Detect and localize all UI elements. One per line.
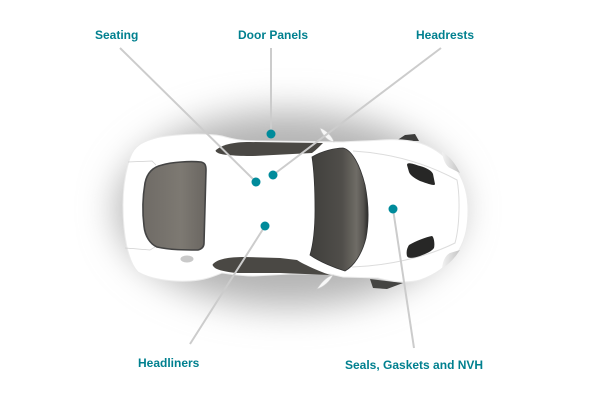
top mirror — [320, 128, 334, 142]
label: Headrests: Headrests — [416, 28, 474, 42]
windshield — [310, 148, 368, 271]
fuel cap — [180, 256, 194, 262]
marker: Seating — [252, 178, 260, 186]
rear tyre bottom — [370, 279, 403, 289]
leader line: Headrests — [273, 48, 441, 175]
leader line: Headliners — [190, 226, 265, 344]
car shadow — [116, 111, 460, 307]
rear tyre top — [396, 134, 419, 141]
bottom vent — [407, 236, 434, 258]
label: Seating: Seating — [95, 28, 138, 42]
label: Headliners: Headliners — [138, 356, 200, 370]
leader line: Door Panels — [270, 48, 272, 134]
rear window — [143, 162, 206, 250]
rear seams — [125, 161, 156, 250]
label: Door Panels: Door Panels — [238, 28, 308, 42]
marker: Headliners — [260, 222, 270, 230]
bonnet seam — [352, 151, 459, 267]
car body — [123, 134, 468, 282]
top side window — [216, 142, 323, 156]
marker: Seals — [388, 204, 398, 214]
marker: Door Panels — [266, 130, 276, 138]
car — [123, 128, 468, 289]
marker: Headrests — [268, 170, 278, 180]
top vent — [407, 163, 435, 185]
bottom side window — [213, 257, 330, 275]
top headlight — [442, 152, 460, 173]
label: Seals, Gaskets and NVH: Seals, Gaskets and NVH — [345, 358, 483, 372]
bottom mirror — [317, 275, 333, 289]
leader line: Seals — [393, 209, 414, 348]
bottom headlight — [442, 250, 460, 268]
leader line: Seating — [120, 48, 256, 182]
